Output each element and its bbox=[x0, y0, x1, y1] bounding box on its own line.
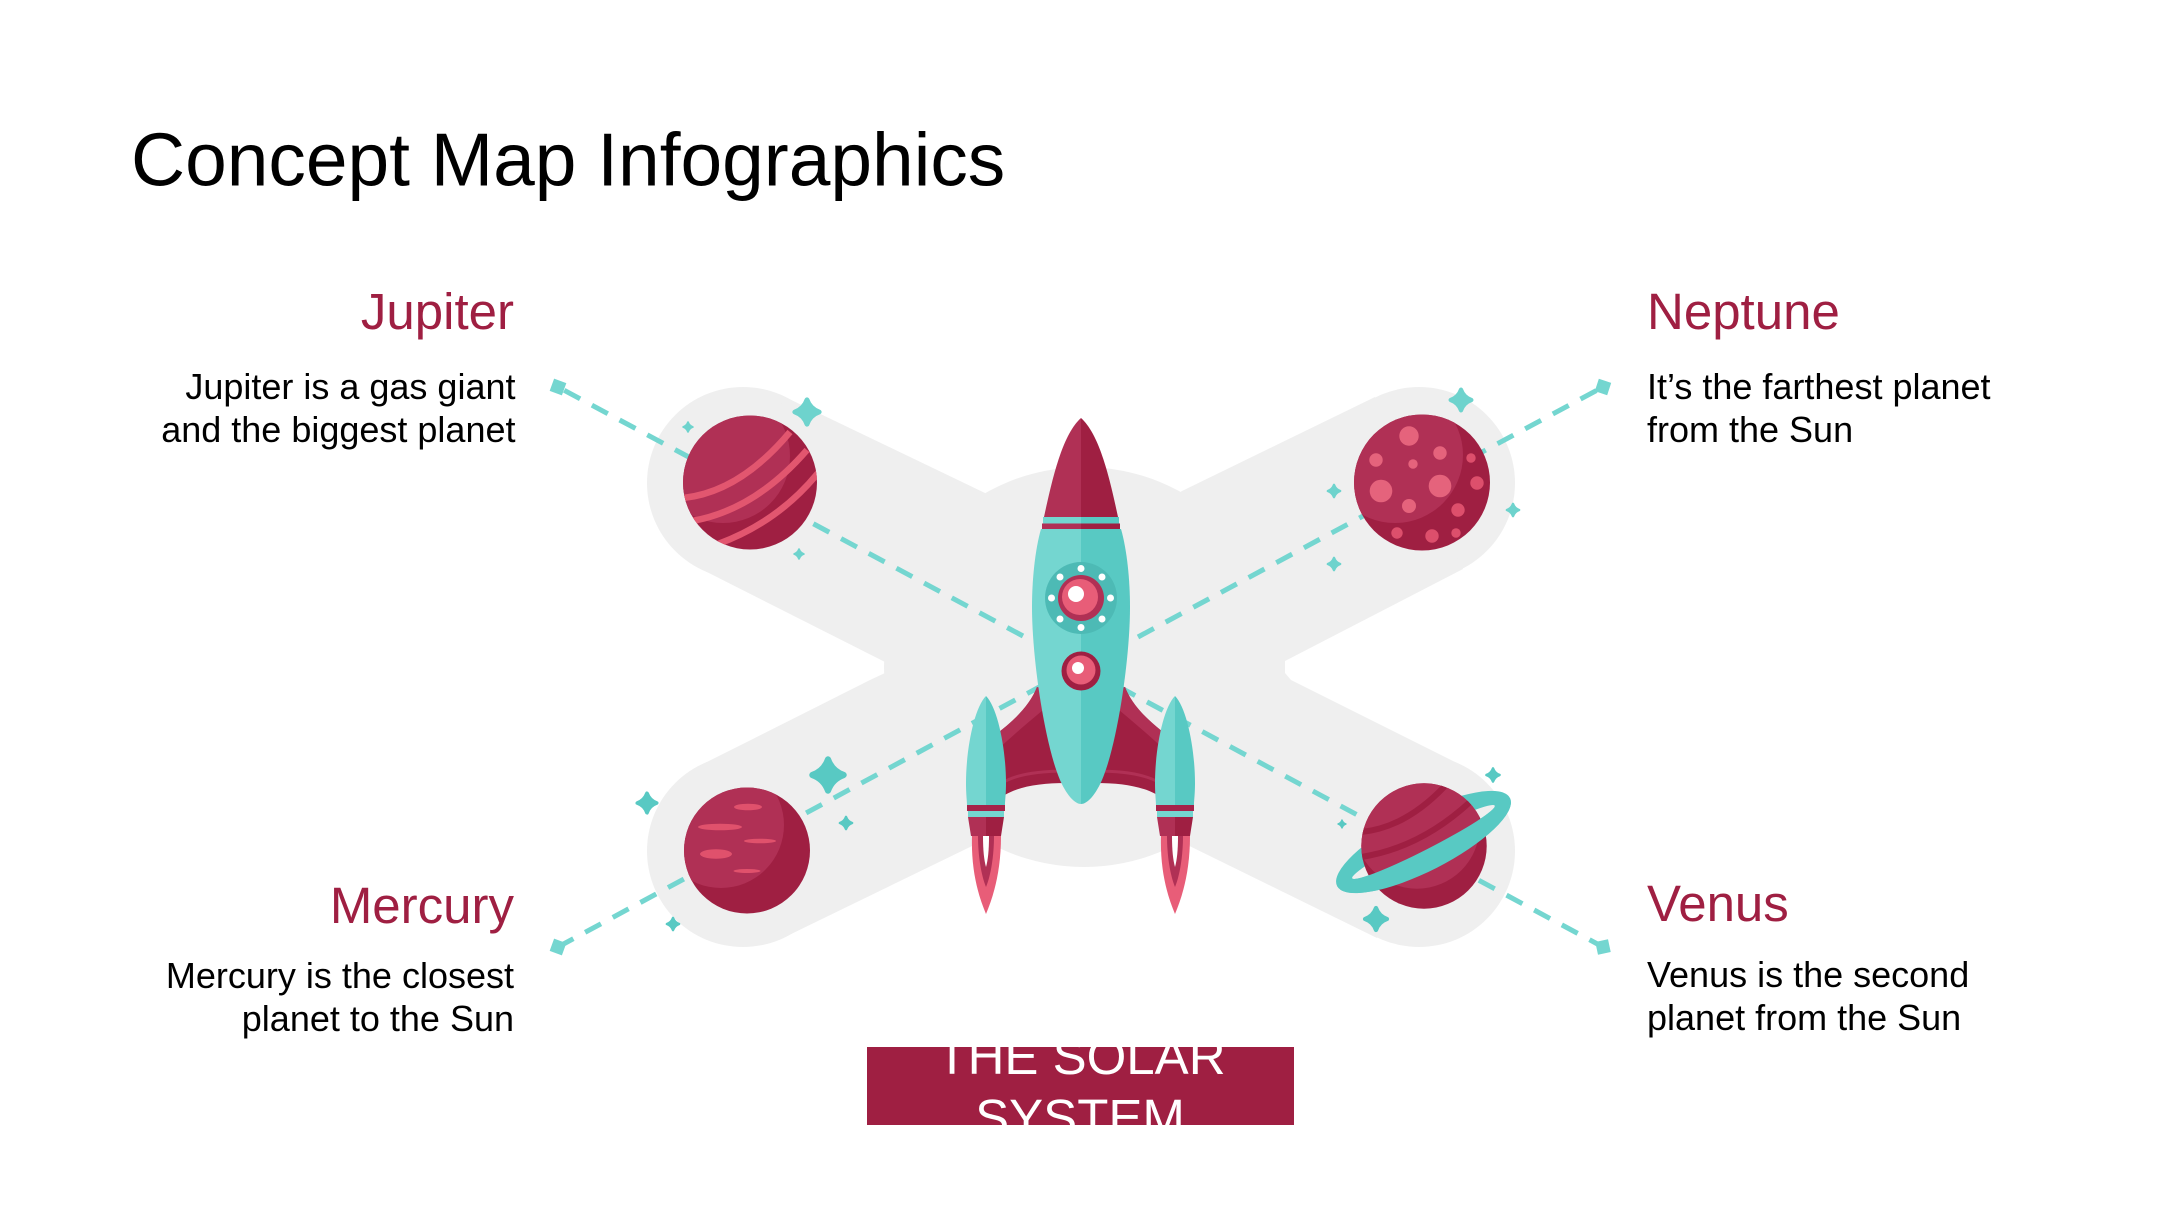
left wing bbox=[995, 687, 1066, 802]
nose cone bbox=[1044, 418, 1118, 517]
center label: The Solar System: SYSTEM bbox=[975, 1089, 1185, 1146]
text block: Neptune: It’s the farthest planet bbox=[1647, 366, 1991, 407]
center label: The Solar System: THE SOLAR bbox=[936, 1028, 1226, 1085]
text block: Jupiter: Jupiter is a gas giant bbox=[185, 366, 516, 407]
rocket body bbox=[1032, 529, 1130, 804]
text block: Jupiter: Jupiter bbox=[361, 283, 514, 340]
text block: Mercury: planet to the Sun bbox=[242, 998, 514, 1039]
dashed connector lines bbox=[558, 387, 1603, 947]
large porthole bbox=[1045, 562, 1117, 634]
planet: Jupiter bbox=[683, 416, 817, 550]
planet: Neptune bbox=[1354, 414, 1490, 550]
text block: Venus: Venus is the second bbox=[1647, 954, 1969, 995]
text block: Mercury: Mercury is the closest bbox=[166, 955, 514, 996]
right booster bbox=[1155, 696, 1195, 914]
text block: Mercury: Mercury bbox=[330, 877, 514, 934]
text block: Jupiter: and the biggest planet bbox=[161, 409, 516, 450]
text block: Neptune: Neptune bbox=[1647, 283, 1840, 340]
left booster bbox=[966, 696, 1006, 914]
planet: Venus with ring bbox=[1336, 783, 1511, 909]
small porthole bbox=[1062, 652, 1100, 690]
text block: Jupiter bbox=[161, 283, 516, 450]
text block: Venus: planet from the Sun bbox=[1647, 997, 1961, 1038]
text block: Venus bbox=[1647, 875, 1969, 1038]
sparkles bbox=[683, 390, 1519, 570]
sparkles darker bbox=[637, 759, 1500, 930]
rocket bbox=[966, 418, 1195, 914]
title: Concept Map Infographics bbox=[131, 118, 1005, 202]
text block: Neptune bbox=[1647, 283, 1991, 450]
grey X background shape bbox=[647, 387, 1515, 947]
text block: Venus: Venus bbox=[1647, 875, 1789, 932]
center label: The Solar System bbox=[867, 1028, 1294, 1146]
planet: Mercury bbox=[684, 788, 810, 914]
collar bands bbox=[1042, 517, 1120, 529]
connector end caps bbox=[550, 379, 1611, 955]
text block: Neptune: from the Sun bbox=[1647, 409, 1853, 450]
text block: Mercury bbox=[166, 877, 514, 1039]
right wing bbox=[1096, 687, 1167, 802]
